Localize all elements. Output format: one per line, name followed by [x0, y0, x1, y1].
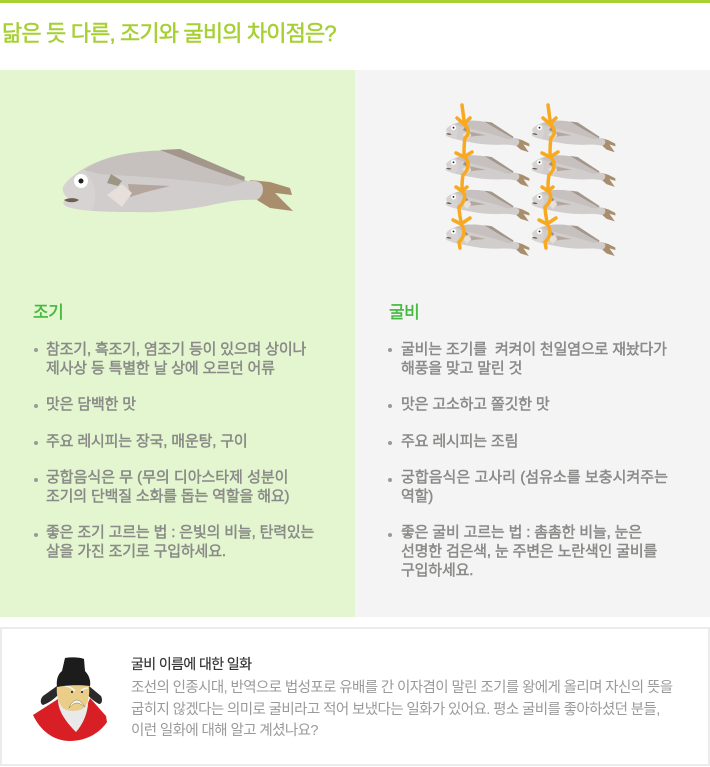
list: 조기 facts: 참조기, 흑조기, 염조기 등이 있으며 상이나 — [46, 341, 306, 358]
heading: 조기: 조기 — [33, 303, 63, 322]
fish group — [445, 115, 619, 256]
icon: strung dried fish — [445, 105, 619, 256]
beard — [58, 698, 88, 732]
list: 굴비 facts: 구입하세요. — [401, 562, 473, 579]
hat wings — [41, 686, 102, 705]
list: 굴비 facts: 좋은 굴비 고르는 법 : 촘촘한 비늘, 눈은 — [401, 524, 642, 541]
list: 조기 facts: 살을 가진 조기로 구입하세요. — [46, 543, 226, 560]
anecdote text: 조선의 인종시대, 반역으로 법성포로 유배를 간 이자겸이 말린 조기를 왕에게 올리며 자신의 뜻을 — [131, 680, 672, 696]
list: 굴비 facts: 역할) — [401, 488, 433, 505]
list: 조기 facts: 조기의 단백질 소화를 돕는 역할을 해요) — [46, 488, 289, 505]
panel: 굴비 — [355, 70, 710, 617]
list: 굴비 facts: 주요 레시피는 조림 — [401, 433, 518, 450]
list: 조기 facts: 좋은 조기 고르는 법 : 은빛의 비늘, 탄력있는 — [46, 524, 314, 541]
list: 조기 facts: 제사상 등 특별한 날 상에 오르던 어류 — [46, 360, 275, 377]
list: 굴비 facts: 맛은 고소하고 쫄깃한 맛 — [401, 396, 550, 413]
list: 조기 facts: 주요 레시피는 장국, 매운탕, 구이 — [46, 433, 248, 450]
anecdote heading: 굴비 이름에 대한 일화 — [131, 656, 251, 672]
anecdote text: 굽히지 않겠다는 의미로 굴비라고 적어 보냈다는 일화가 있어요. 평소 굴비를 좋아하셨던 분들, — [131, 702, 660, 718]
top accent bar — [0, 0, 710, 3]
list: 굴비 facts: 선명한 검은색, 눈 주변은 노란색인 굴비를 — [401, 543, 657, 560]
red robe — [33, 698, 107, 741]
list: 조기 facts: 궁합음식은 무 (무의 디아스타제 성분이 — [46, 469, 288, 486]
rope left — [453, 105, 472, 248]
icon: large fish — [63, 149, 293, 212]
title: 닮은 듯 다른, 조기와 굴비의 차이점은? — [2, 21, 336, 46]
icon: king portrait — [33, 657, 107, 741]
list: 조기 facts — [34, 341, 314, 560]
anecdote text: 이런 일화에 대해 알고 계셨나요? — [131, 723, 318, 739]
eyebrows and eyes — [65, 686, 88, 691]
heading: 굴비: 굴비 — [389, 303, 419, 322]
list: 굴비 facts — [388, 341, 668, 579]
panel: 조기 — [0, 70, 355, 617]
face — [57, 686, 89, 711]
list: 굴비 facts: 해풍을 맞고 말린 것 — [401, 360, 522, 377]
list: 조기 facts: 맛은 담백한 맛 — [46, 396, 136, 413]
panel: anecdote box — [0, 627, 710, 766]
moustache — [69, 700, 85, 708]
list: 굴비 facts: 굴비는 조기를 켜켜이 천일염으로 재놨다가 — [401, 341, 667, 358]
anecdote text — [131, 680, 672, 739]
list: 굴비 facts: 궁합음식은 고사리 (섬유소를 보충시켜주는 — [401, 469, 668, 486]
hat — [57, 657, 90, 687]
rope right — [539, 105, 558, 248]
